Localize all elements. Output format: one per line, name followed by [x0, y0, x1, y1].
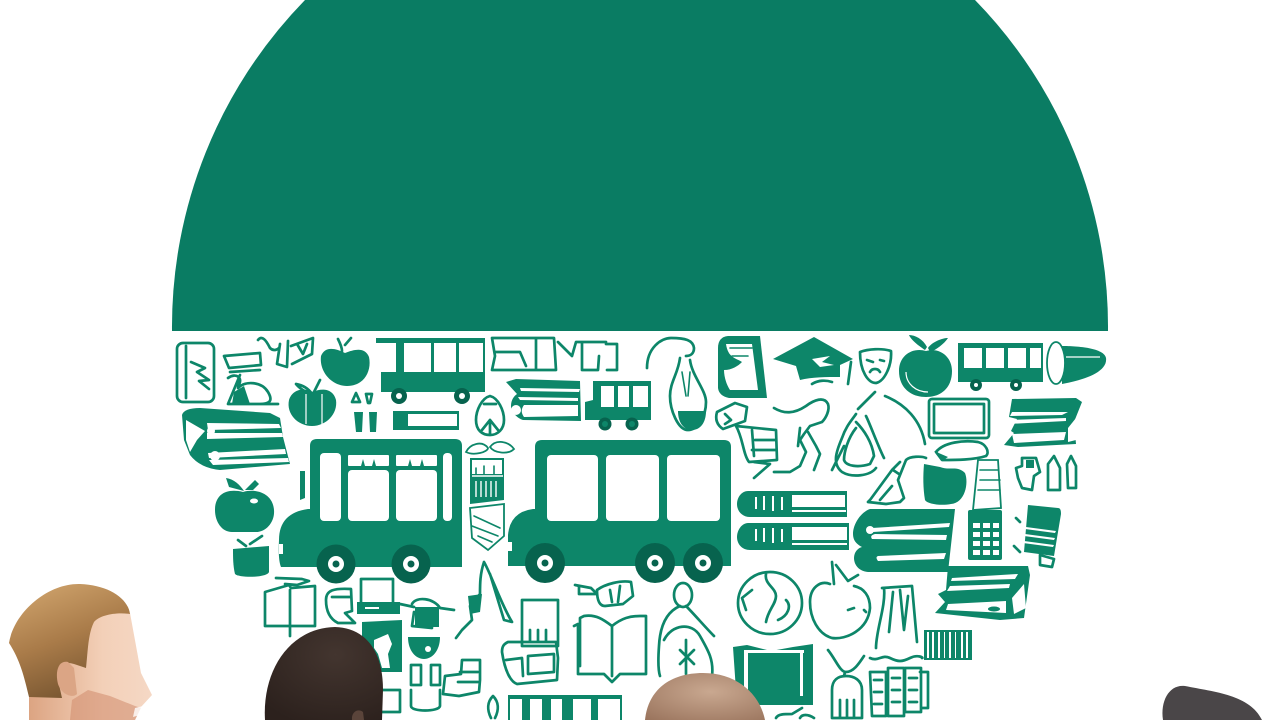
icon: open book large: [574, 616, 646, 682]
icon: small bell: [488, 696, 498, 718]
icon: dark book: [718, 336, 767, 398]
icon: notepad: [1014, 505, 1061, 567]
icon: open book outline: [265, 578, 315, 636]
icon: outline apple: [289, 380, 336, 426]
icon: notepad stack: [443, 660, 480, 696]
icon: tablet and rolls: [502, 600, 558, 684]
icon: book stack lower right: [935, 566, 1030, 620]
icon: phone sketch: [326, 589, 355, 623]
icon: laptop: [357, 579, 400, 614]
icon: outline books: [492, 338, 617, 370]
icon: small bus top: [376, 338, 485, 404]
icon: globe: [738, 572, 802, 634]
icon: pens and pencils: [1016, 456, 1076, 490]
icon: big apple: [899, 335, 952, 397]
icon: bottom bus: [508, 695, 622, 720]
icon: solid apple: [321, 338, 370, 386]
icon: large bus left: [279, 439, 462, 584]
icon: outline apple lower: [810, 562, 870, 638]
icon: dark document: [362, 620, 402, 672]
icon: backpack: [832, 414, 884, 475]
person: dark hair at right: [1162, 686, 1262, 720]
icon: sliding figure: [456, 562, 512, 638]
green circle top: [172, 0, 1108, 331]
icon: pear face: [476, 396, 504, 435]
icon: computer mouse: [934, 441, 988, 461]
person: man with blond hair: [9, 584, 152, 720]
icon: bitten apple: [923, 464, 966, 505]
icon: book bars: [737, 491, 847, 517]
icon: folded notebook: [736, 426, 777, 478]
icon: calculator: [968, 460, 1002, 560]
icon: fish shape: [575, 581, 633, 606]
icon: sketch figure: [774, 400, 829, 472]
icon: tablet: [177, 343, 214, 402]
icon: book bar: [393, 411, 459, 430]
icon: book stack left: [182, 408, 290, 470]
icon: book stack right: [853, 509, 955, 572]
icon: solid green book: [733, 644, 813, 705]
icon: small bus right: [958, 343, 1043, 391]
icon: sketch globe stand: [400, 599, 454, 659]
icon: book stack top right: [1004, 398, 1082, 447]
icon: chair: [868, 457, 926, 504]
icon: second book bar: [737, 523, 849, 550]
icon: square apple: [233, 536, 269, 577]
person: bald head: [645, 673, 765, 720]
icon: gem: [716, 403, 747, 429]
icon: seated figure: [658, 583, 714, 676]
icon: books stack middle: [506, 379, 581, 421]
icon: book spines: [870, 668, 928, 716]
icon: U magnet rack: [380, 665, 440, 712]
icon: small cups: [352, 393, 377, 432]
icon: hanging scarf: [870, 586, 922, 661]
icon: bottom fragment: [776, 708, 814, 718]
person: dark haired head: [265, 627, 383, 720]
icon: small bus middle: [585, 381, 651, 430]
icon: tassel: [828, 650, 864, 718]
icon: graduation cap: [773, 337, 853, 384]
icon: solid apple with highlight: [215, 478, 274, 532]
icon: sketched face: [858, 349, 925, 444]
icon: scarf and flask: [647, 338, 706, 430]
icon: satchel between buses: [466, 442, 514, 550]
icon: large bus right: [508, 440, 731, 583]
icon: scribble note: [258, 338, 313, 367]
icon: bread slice: [1047, 342, 1106, 384]
icon: hourglass scale: [224, 353, 278, 404]
icon: barcode: [924, 630, 972, 660]
icon: monitor: [929, 399, 989, 438]
